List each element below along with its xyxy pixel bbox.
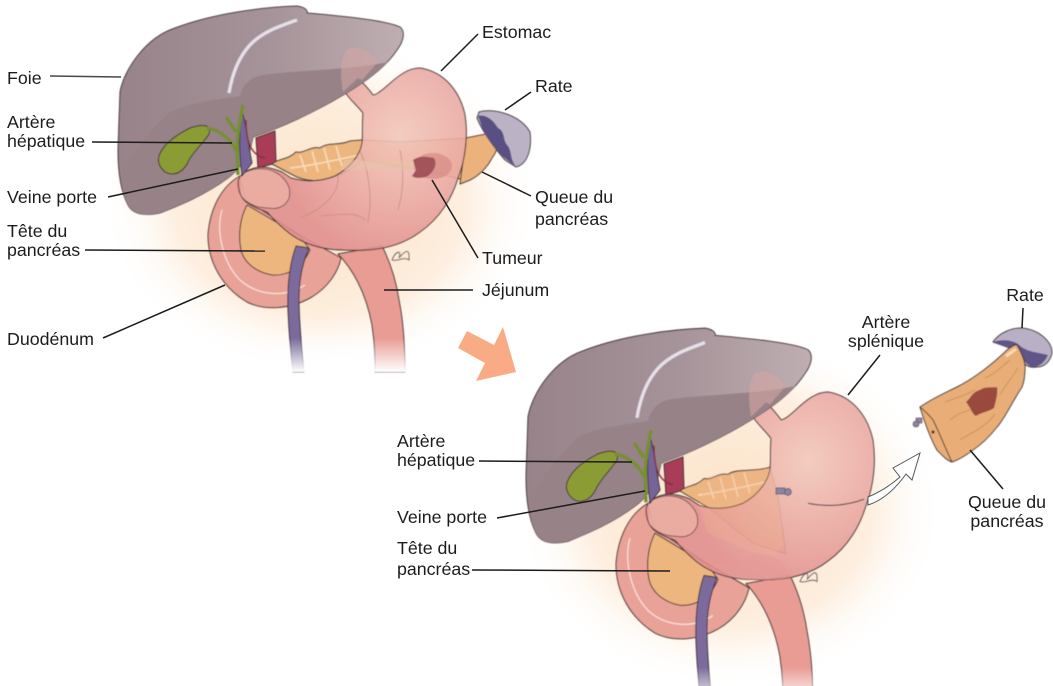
label: Rate (bottom) — [1006, 285, 1044, 328]
label: Artère hépatique (top): Artère — [7, 112, 56, 132]
splenic artery clip — [776, 488, 791, 495]
label: Veine porte (bottom) — [397, 491, 645, 527]
label: Queue du pancréas (bottom) — [968, 450, 1046, 531]
highlight — [1006, 349, 1016, 356]
label: Artère splénique: Artère — [862, 312, 910, 332]
jejunum through stomach — [733, 555, 792, 581]
label: Duodénum: Duodénum — [7, 329, 94, 349]
liver ligament — [229, 20, 297, 93]
label: Rate (top) — [505, 76, 573, 110]
gallbladder — [158, 126, 210, 174]
label: Estomac: Estomac — [482, 22, 551, 42]
tube to tumour — [340, 160, 415, 170]
label: Queue du pancréas (bottom): Queue du — [968, 492, 1046, 512]
bile ducts — [615, 430, 651, 502]
label: Rate (bottom): Rate — [1006, 285, 1044, 305]
gallbladder — [566, 451, 618, 501]
pancreas head — [240, 205, 310, 275]
label: Artère hépatique (top) — [7, 112, 232, 151]
label: Foie — [7, 68, 121, 88]
label: Artère hépatique (bottom) — [397, 431, 632, 470]
label: Jéjunum: Jéjunum — [482, 280, 549, 300]
label: Queue du pancréas (bottom): pancréas — [970, 511, 1044, 531]
stomach — [646, 392, 874, 580]
label: Rate (top): Rate — [535, 76, 573, 96]
aorta — [664, 457, 684, 495]
glow: bottom illustration — [515, 330, 945, 686]
pancreas body remnant — [680, 467, 786, 554]
liver ligament — [637, 343, 705, 418]
liver — [526, 328, 811, 543]
arrow: white removal — [868, 453, 920, 505]
liver — [118, 6, 403, 214]
illustration: organs before surgery — [118, 6, 530, 372]
pancreas tail — [460, 133, 498, 184]
fade out lower vessels — [678, 667, 828, 686]
excised pancreas body — [920, 345, 1025, 462]
label: Veine porte (bottom): Veine porte — [397, 507, 487, 527]
stomach vessels — [300, 150, 403, 222]
jejunum — [746, 575, 813, 686]
esophagus behind liver — [341, 48, 378, 92]
tumour — [412, 153, 452, 179]
pancreas body — [272, 138, 470, 180]
stomach incision — [808, 499, 864, 505]
label: Artère splénique — [848, 312, 924, 395]
portal vein upper — [240, 112, 252, 176]
splenic artery stub — [913, 418, 922, 427]
fade out lower vessels — [270, 338, 420, 372]
spleen — [477, 111, 530, 167]
label: Tumeur: Tumeur — [482, 248, 543, 268]
label: Tête du pancréas (top): pancréas — [7, 240, 80, 260]
hepatic artery — [654, 446, 673, 485]
illustration: organs after surgery — [526, 328, 874, 686]
label: Queue du pancréas (top) — [482, 172, 613, 229]
duodenum — [208, 176, 341, 308]
cut edge — [920, 407, 952, 462]
label: Artère splénique: splénique — [848, 331, 924, 351]
duct hole — [931, 430, 935, 434]
label: Tête du pancréas (bottom): pancréas — [397, 559, 470, 579]
excised pancreas and spleen — [913, 328, 1052, 462]
esophagus behind liver — [749, 371, 786, 417]
label: Duodénum — [7, 285, 225, 349]
hepatic artery — [246, 120, 265, 158]
portal vein lower — [288, 246, 309, 372]
label: Artère hépatique (top): hépatique — [7, 131, 85, 151]
label: Veine porte (top) — [7, 169, 238, 207]
duodenum highlight — [628, 538, 713, 624]
bile ducts — [207, 105, 243, 175]
signature — [392, 251, 409, 260]
signature — [800, 573, 817, 582]
portal vein upper — [648, 437, 660, 503]
liver underside — [121, 62, 388, 214]
label: Tête du pancréas (bottom): Tête du — [397, 538, 457, 558]
stomach — [238, 68, 466, 250]
label: Artère hépatique (bottom): Artère — [397, 431, 446, 451]
glow: top illustration — [100, 35, 540, 375]
jejunum — [338, 246, 405, 372]
label: Tumeur — [432, 180, 543, 268]
label: Tête du pancréas (bottom) — [397, 538, 670, 579]
aorta — [256, 131, 276, 168]
label: Queue du pancréas (top): Queue du — [535, 187, 613, 207]
portal vein lower — [696, 575, 717, 686]
pancreas texture — [945, 360, 1018, 440]
label: Foie: Foie — [7, 68, 42, 88]
pancreas lobule texture — [698, 472, 768, 499]
label: Artère hépatique (bottom): hépatique — [397, 450, 475, 470]
pylorus fold — [648, 496, 698, 537]
liver underside — [529, 386, 796, 543]
label: Queue du pancréas (top): pancréas — [535, 209, 608, 229]
pancreas stump seen through stomach — [699, 467, 784, 557]
excised spleen — [993, 328, 1052, 367]
label: Veine porte (top): Veine porte — [7, 187, 97, 207]
label: Tête du pancréas (top): Tête du — [7, 221, 67, 241]
duodenum highlight — [220, 210, 305, 294]
pylorus fold — [240, 169, 290, 209]
arrow: orange transition — [458, 327, 516, 381]
label: Estomac — [441, 22, 551, 71]
duodenum — [616, 503, 749, 639]
pancreas lobule texture — [290, 146, 360, 172]
pancreas head — [648, 533, 718, 605]
label: Tête du pancréas (top) — [7, 221, 265, 260]
tumour — [966, 387, 997, 416]
